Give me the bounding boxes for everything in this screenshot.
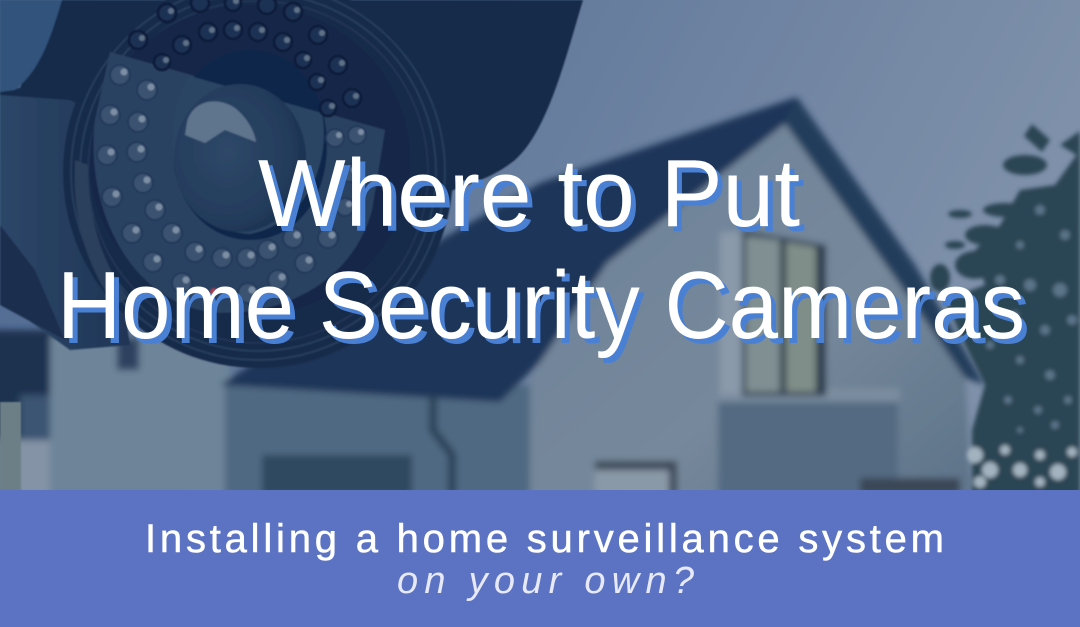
lower window <box>595 461 677 495</box>
title line 1: Where to Put <box>258 140 800 247</box>
far left dark corner <box>0 330 60 440</box>
subtitle: Installing a home surveillance system <box>145 517 944 561</box>
lower LEDs <box>97 65 366 303</box>
tree blossoms <box>967 445 1077 488</box>
roof <box>220 97 797 402</box>
lower LED plate <box>94 52 385 313</box>
camera mount <box>0 402 21 492</box>
camera body <box>0 90 130 350</box>
upper window <box>742 230 826 396</box>
bottom band <box>0 490 1080 627</box>
roof right edge <box>784 97 985 385</box>
lens housing <box>172 50 327 240</box>
photo background <box>0 0 1080 495</box>
upper LED highlights <box>139 0 359 109</box>
gable wall <box>530 117 972 495</box>
lens tube <box>172 76 324 234</box>
hood side <box>0 0 62 92</box>
balcony <box>718 392 898 495</box>
title line 2: Home Security Cameras <box>57 252 1025 359</box>
left rim highlight <box>75 160 128 305</box>
garage door <box>262 455 412 495</box>
subtitle italic line: on your own? <box>397 560 695 602</box>
house <box>0 97 985 495</box>
camera <box>0 0 583 368</box>
outer rim <box>63 0 453 368</box>
lens reflection <box>185 101 256 143</box>
small dark window <box>117 338 139 370</box>
drain pipe <box>433 395 452 495</box>
red indicator light <box>210 288 218 296</box>
sky <box>0 0 1080 490</box>
title <box>57 140 1025 359</box>
lower LED highlights <box>108 68 364 294</box>
upper LEDs <box>129 0 361 116</box>
left house wing <box>50 335 230 495</box>
camera hood <box>0 0 583 200</box>
lens <box>174 84 306 232</box>
tree <box>930 124 1080 495</box>
LED plate upper <box>90 5 410 315</box>
lower right window <box>860 478 960 495</box>
